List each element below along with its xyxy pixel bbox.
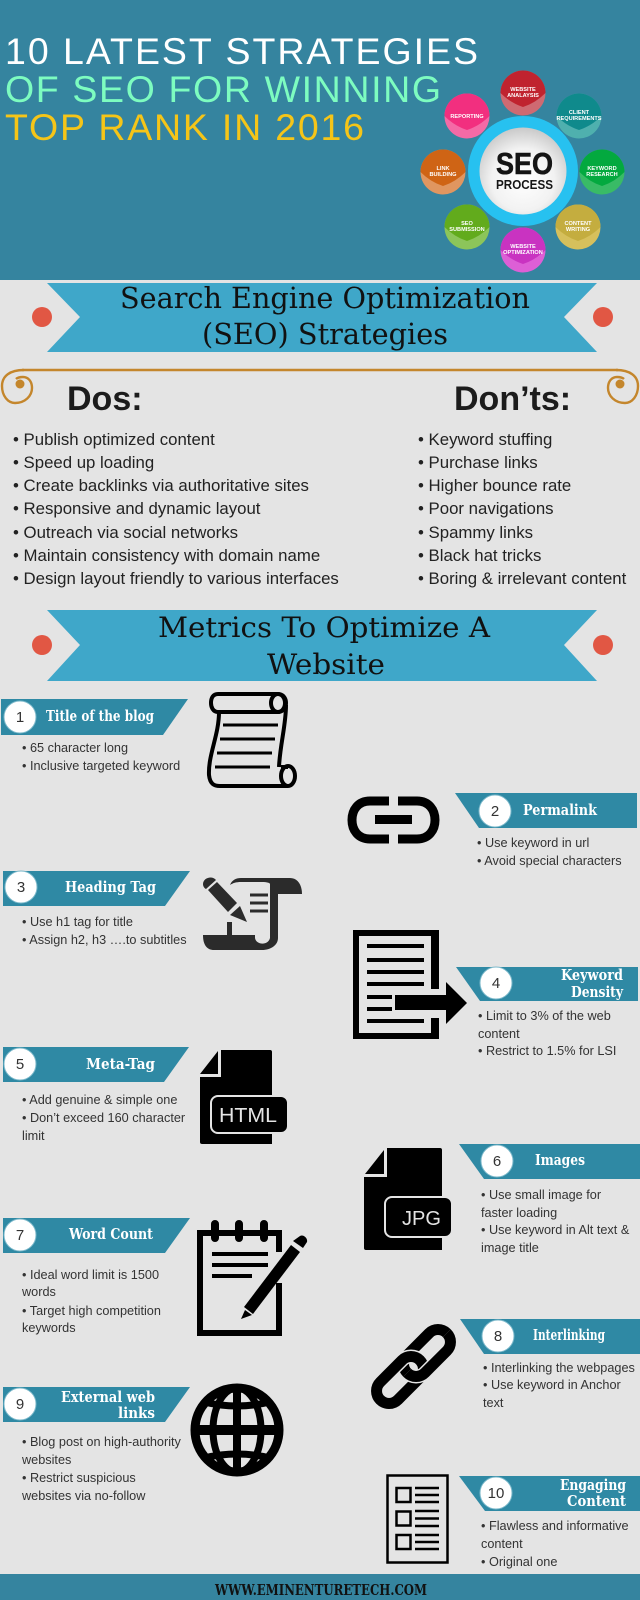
dos heading: Dos: — [67, 380, 143, 418]
node: keyword research: KEYWORD — [587, 166, 617, 172]
metric 9: external web links: links — [118, 1404, 155, 1422]
metric 1: title of the blog — [1, 699, 188, 773]
SEO process diagram — [420, 70, 624, 272]
metric 6: images: • Use small image for — [481, 1188, 602, 1202]
node: link building: LINK — [436, 166, 450, 172]
metric 6: images — [459, 1144, 640, 1255]
metric 10: engaging content — [459, 1476, 640, 1569]
metric 10: engaging content: content — [481, 1537, 523, 1551]
icon: HTML file: HTML — [219, 1105, 277, 1127]
metric 6: images: faster loading — [481, 1206, 557, 1220]
metric 5: meta-tag: 5 — [16, 1056, 24, 1073]
node: content writing: WRITING — [566, 227, 590, 233]
metric 2: permalink: Permalink — [523, 801, 598, 819]
title: TOP RANK IN 2016 — [5, 106, 364, 148]
icon: scroll and pencil — [203, 877, 302, 950]
dos list: • Speed up loading — [13, 453, 154, 472]
node: website optimization — [500, 228, 546, 272]
metric 10: engaging content: • Original one — [481, 1555, 557, 1569]
metric 7: word count: Word Count — [68, 1225, 153, 1243]
node: website analysis: ANALAYSIS — [507, 93, 539, 99]
metric 6: images: image title — [481, 1241, 539, 1255]
icon: broken link — [352, 801, 435, 839]
metric 9: external web links: • Restrict suspicious — [22, 1471, 136, 1485]
footer band — [0, 1574, 640, 1600]
donts list: • Boring & irrelevant content — [418, 569, 627, 588]
metric 5: meta-tag: Meta-Tag — [86, 1055, 155, 1073]
metric 1: title of the blog: Title of the blog — [46, 707, 154, 725]
dos list: • Maintain consistency with domain name — [13, 546, 320, 565]
metric 9: external web links: 9 — [16, 1396, 24, 1413]
metric 7: word count: words — [21, 1285, 56, 1299]
dos list: • Publish optimized content — [13, 430, 215, 449]
metric 2: permalink: 2 — [491, 803, 499, 820]
dos list: • Outreach via social networks — [13, 523, 238, 542]
banner: SEO strategies — [32, 281, 613, 352]
metric 8: interlinking: text — [483, 1396, 504, 1410]
decorative scroll bracket — [2, 370, 638, 403]
node: keyword research — [580, 150, 624, 194]
metric 9: external web links — [3, 1387, 190, 1503]
metric 9: external web links: websites — [21, 1453, 71, 1467]
metric 7: word count: • Ideal word limit is 1500 — [22, 1268, 159, 1282]
metric 5: meta-tag — [3, 1047, 189, 1143]
node: website optimization: WEBSITE — [510, 244, 536, 250]
icon: document with arrow — [353, 930, 467, 1039]
dos list: • Design layout friendly to various interfaces — [13, 569, 339, 588]
node: website optimization: OPTIMIZATION — [503, 250, 543, 256]
node: client requirements: REQUIREMENTS — [556, 116, 602, 122]
metric 1: title of the blog: • Inclusive targeted keyword — [22, 759, 180, 773]
footer website text: WWW.EMINENTURETECH.COM — [214, 1581, 427, 1599]
metric 5: meta-tag: limit — [22, 1129, 45, 1143]
metric 4: keyword density: • Limit to 3% of the web — [478, 1009, 611, 1023]
metric 3: heading tag: • Use h1 tag for title — [22, 915, 133, 929]
donts list: • Black hat tricks — [418, 546, 541, 565]
metric 8: interlinking: Interlinking — [533, 1326, 605, 1344]
node: keyword research: RESEARCH — [586, 172, 618, 178]
node: content writing: CONTENT — [564, 221, 592, 227]
node: link building — [420, 150, 466, 194]
node: seo submission — [444, 204, 490, 250]
dos column — [13, 380, 339, 588]
metric 7: word count — [3, 1218, 190, 1335]
metric 8: interlinking: • Use keyword in Anchor — [483, 1378, 621, 1392]
metric 4: keyword density: Keyword — [561, 966, 623, 984]
node: client requirements — [556, 94, 602, 138]
metric 2: permalink: • Avoid special characters — [477, 854, 622, 868]
donts list: • Poor navigations — [418, 499, 554, 518]
metric 3: heading tag: • Assign h2, h3 ….to subtitles — [22, 933, 187, 947]
metric 4: keyword density: Density — [571, 983, 624, 1001]
metric 7: word count: keywords — [22, 1321, 76, 1335]
donts heading: Don’ts: — [454, 380, 571, 418]
title — [5, 30, 478, 148]
node: reporting: REPORTING — [450, 114, 484, 120]
metric 9: external web links: • Blog post on high-authority — [22, 1435, 182, 1449]
metric 5: meta-tag: • Add genuine & simple one — [22, 1093, 177, 1107]
node: client requirements: CLIENT — [569, 110, 590, 116]
donts list: • Purchase links — [418, 453, 538, 472]
metric 8: interlinking: 8 — [494, 1328, 502, 1345]
metric 6: images: 6 — [493, 1153, 501, 1170]
metric 7: word count: • Target high competition — [22, 1304, 161, 1318]
icon: checklist — [388, 1476, 448, 1562]
banner: SEO strategies: Search Engine Optimization — [120, 281, 530, 315]
node: website analysis — [500, 70, 546, 116]
SEO process diagram: PROCESS — [496, 177, 553, 192]
metric 4: keyword density: content — [478, 1027, 520, 1041]
banner: metrics: Metrics To Optimize A — [158, 611, 491, 644]
metric 3: heading tag — [3, 871, 190, 947]
metric 9: external web links: External web — [61, 1388, 155, 1406]
banner: metrics — [32, 610, 613, 681]
icon: JPG file: JPG — [402, 1208, 441, 1230]
donts list: • Spammy links — [418, 523, 533, 542]
metric 9: external web links: websites via no-follow — [21, 1489, 146, 1503]
title: 10 LATEST STRATEGIES — [5, 30, 478, 72]
node: seo submission: SEO — [461, 221, 474, 227]
icon: notepad and pencil — [200, 1224, 307, 1333]
banner: SEO strategies: (SEO) Strategies — [202, 317, 448, 351]
node: content writing — [556, 204, 600, 250]
donts list: • Higher bounce rate — [418, 476, 571, 495]
metric 1: title of the blog: • 65 character long — [22, 741, 128, 755]
donts list — [418, 430, 627, 588]
donts list: • Keyword stuffing — [418, 430, 552, 449]
metric 8: interlinking — [460, 1319, 640, 1410]
metric 4: keyword density: 4 — [492, 975, 500, 992]
metric 2: permalink — [455, 793, 637, 868]
node: link building: BUILDING — [429, 172, 457, 178]
icon: JPG file — [364, 1148, 452, 1250]
SEO process diagram: SEO — [496, 146, 553, 181]
metric 10: engaging content: • Flawless and informative — [481, 1519, 629, 1533]
donts column — [418, 380, 627, 588]
metric 7: word count: 7 — [16, 1227, 24, 1244]
metric 10: engaging content: Engaging — [560, 1476, 626, 1494]
metric 4: keyword density — [456, 966, 638, 1058]
node: seo submission: SUBMISSION — [449, 227, 485, 233]
dos list: • Responsive and dynamic layout — [13, 499, 261, 518]
metric 5: meta-tag: • Don’t exceed 160 character — [22, 1111, 186, 1125]
node: reporting — [444, 94, 490, 138]
metric 10: engaging content: Content — [567, 1492, 626, 1510]
icon: chain links — [371, 1324, 456, 1409]
metric 6: images: Images — [535, 1151, 585, 1169]
icon: paper scroll — [209, 694, 295, 786]
dos list: • Create backlinks via authoritative sites — [13, 476, 309, 495]
dos list — [13, 430, 339, 588]
metric 8: interlinking: • Interlinking the webpages — [483, 1361, 635, 1375]
icon: globe — [195, 1388, 279, 1472]
icon: HTML file — [200, 1050, 288, 1144]
metric 2: permalink: • Use keyword in url — [477, 836, 589, 850]
metric 4: keyword density: • Restrict to 1.5% for LSI — [478, 1044, 616, 1058]
header band — [0, 0, 640, 280]
metric 10: engaging content: 10 — [488, 1485, 504, 1502]
metric 3: heading tag: Heading Tag — [65, 878, 156, 896]
metric 6: images: • Use keyword in Alt text & — [481, 1223, 630, 1237]
node: website analysis: WEBSITE — [510, 87, 536, 93]
metric 1: title of the blog: 1 — [16, 709, 24, 726]
title: OF SEO FOR WINNING — [5, 68, 441, 110]
metric 3: heading tag: 3 — [17, 879, 25, 896]
banner: metrics: Website — [267, 648, 385, 681]
